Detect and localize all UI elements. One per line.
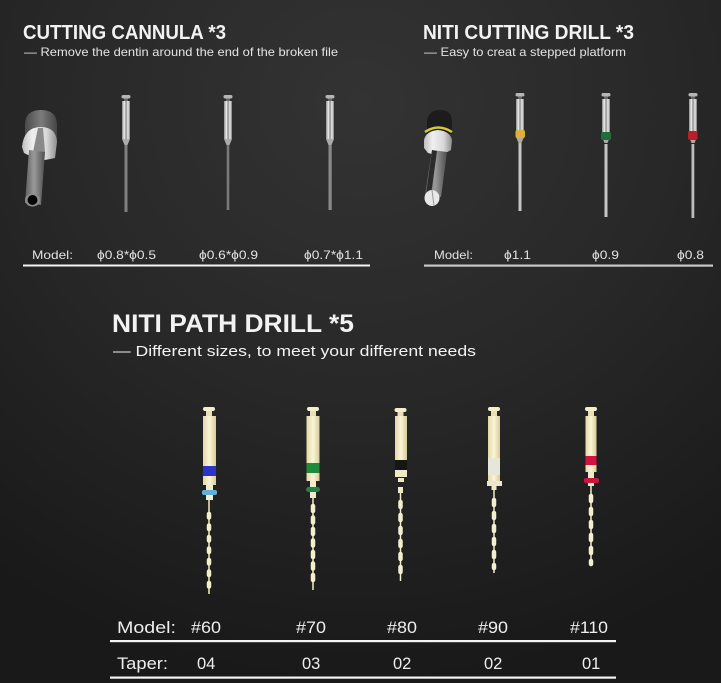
model row: niti cutting drill: Model:: [434, 248, 473, 262]
table: model and taper: Model:: [117, 619, 176, 637]
model row: cutting cannula: ϕ0.8*ϕ0.5: [97, 248, 156, 262]
table: model and taper: [110, 619, 616, 679]
table: model and taper: 01: [582, 655, 600, 673]
model row: niti cutting drill: ϕ0.8: [677, 248, 704, 262]
table: model and taper: 04: [197, 655, 215, 673]
table: model and taper: 02: [484, 655, 502, 673]
heading: cutting cannula: CUTTING CANNULA *3: [23, 22, 226, 44]
panel: niti path drill: [110, 310, 616, 679]
model row: niti cutting drill: [424, 248, 713, 267]
heading: niti cutting drill: NITI CUTTING DRILL *3: [423, 22, 634, 44]
icon: path drill 60 blue: [202, 407, 217, 594]
table: model and taper: Taper:: [117, 655, 168, 673]
model row: cutting cannula: Model:: [32, 248, 73, 262]
icon: drill 0.9 green: [601, 93, 611, 217]
description: cutting cannula: — Remove the dentin around the end of the broken file: [24, 45, 338, 59]
table: model and taper: 02: [393, 655, 411, 673]
description: niti cutting drill: — Easy to creat a stepped platform: [424, 45, 626, 59]
model row: cutting cannula: ϕ0.6*ϕ0.9: [199, 248, 258, 262]
model row: niti cutting drill: ϕ1.1: [504, 248, 531, 262]
icon: cannula 0.7*1.1: [326, 95, 334, 210]
table: model and taper: #80: [387, 619, 417, 637]
icon: cannula 0.8*0.5: [122, 95, 130, 212]
table: model and taper: #60: [191, 619, 221, 637]
icon: path drill 110 red: [584, 407, 599, 566]
model row: cutting cannula: ϕ0.7*ϕ1.1: [304, 248, 363, 262]
icon: drill 1.1 yellow: [516, 93, 525, 211]
table: model and taper: #90: [478, 619, 508, 637]
icon: path drill 70 green: [306, 407, 320, 590]
heading: niti path drill: NITI PATH DRILL *5: [112, 310, 354, 338]
model row: cutting cannula: [23, 248, 370, 266]
model row: niti cutting drill: ϕ0.9: [592, 248, 619, 262]
table: model and taper: #70: [296, 619, 326, 637]
table: model and taper: #110: [570, 619, 608, 637]
icon: drill 0.8 red: [688, 93, 698, 218]
table: model and taper: 03: [302, 655, 320, 673]
description: niti path drill: — Different sizes, to meet your different needs: [113, 343, 476, 360]
icon: large cannula close-up: [22, 110, 57, 206]
panel: cutting cannula: [22, 22, 370, 266]
panel: niti cutting drill: [423, 22, 713, 267]
icon: path drill 90 white: [487, 407, 502, 573]
icon: cannula 0.6*0.9: [224, 95, 232, 210]
icon: large drill close-up: [424, 110, 452, 206]
icon: path drill 80 black: [394, 408, 407, 581]
